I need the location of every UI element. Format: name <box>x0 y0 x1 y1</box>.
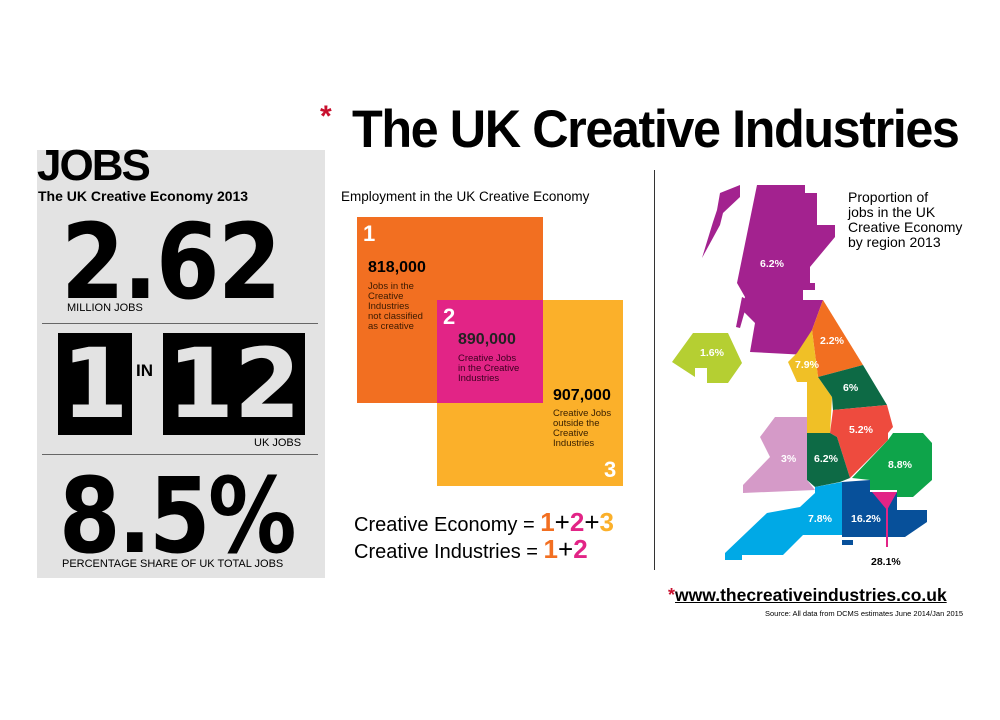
map heading: Creative Economy <box>848 219 962 235</box>
chart: venn squares: 3 <box>604 457 616 482</box>
heading: employment: Employment in the UK Creative Economy <box>341 189 589 204</box>
heading: JOBS: JOBS <box>37 141 149 190</box>
chart: venn squares: Jobs in the <box>368 281 414 292</box>
stat: 1 in 12: IN <box>136 361 153 380</box>
chart: venn squares: Creative Jobs <box>458 353 516 364</box>
panel: jobs <box>37 150 325 578</box>
chart: venn squares <box>357 217 623 486</box>
chart: UK map: 7.9% <box>795 359 820 371</box>
map heading: by region 2013 <box>848 234 941 250</box>
label 2: 2 <box>443 304 455 329</box>
stat: 8.5%: 8.5% <box>59 455 294 577</box>
title: The UK Creative Industries <box>352 100 958 159</box>
chart: UK map: 6.2% <box>814 453 839 465</box>
chart: venn squares: in the Creative <box>458 363 519 374</box>
icon: union jack asterisk: * <box>320 100 332 133</box>
stat: 1 in 12: 1 <box>62 328 128 440</box>
chart: UK map: 3% <box>781 453 797 465</box>
source note: Source: All data from DCMS estimates June 2014/Jan 2015 <box>765 609 963 618</box>
chart: UK map: 2.2% <box>820 335 845 347</box>
chart: venn squares: Industries <box>553 438 594 449</box>
chart: venn squares: 890,000 <box>458 331 516 348</box>
stat: 2.62 million jobs: 2.62 <box>61 201 280 323</box>
map heading <box>848 189 962 250</box>
stat: 1 in 12: 12 <box>167 328 301 440</box>
label 3: 907,000 <box>553 387 611 404</box>
stat: 1 in 12 <box>58 328 305 449</box>
chart: venn squares: Creative <box>368 291 403 302</box>
chart: UK map: 28.1% <box>871 556 901 568</box>
equations <box>354 507 614 564</box>
chart: UK map: 8.8% <box>888 459 913 471</box>
chart: venn squares: outside the <box>553 418 599 429</box>
map heading: jobs in the UK <box>848 204 935 220</box>
chart: UK map: 16.2% <box>851 513 881 525</box>
label 1: 1 <box>363 221 375 246</box>
chart: venn squares: Industries <box>368 301 409 312</box>
stat: 8.5%: PERCENTAGE SHARE OF UK TOTAL JOBS <box>62 558 283 570</box>
website link: *www.thecreativeindustries.co.uk <box>668 585 947 605</box>
equations: Creative Industries = 1+2 <box>354 534 588 564</box>
chart: venn squares: Creative <box>553 428 588 439</box>
chart: UK map: 5.2% <box>849 424 874 436</box>
chart: venn squares: 818,000 <box>368 259 426 276</box>
chart: venn squares: as creative <box>368 321 414 332</box>
chart: UK map: 6.2% <box>760 258 785 270</box>
map heading: Proportion of <box>848 189 928 205</box>
chart: venn squares: Industries <box>458 373 499 384</box>
equations: Creative Economy = 1+2+3 <box>354 507 614 537</box>
chart: UK map: 6% <box>843 382 859 394</box>
stat: 2.62 million jobs: MILLION JOBS <box>67 302 143 314</box>
chart: UK map: 7.8% <box>808 513 833 525</box>
chart: venn squares: not classified <box>368 311 423 322</box>
chart: venn squares: Creative Jobs <box>553 408 611 419</box>
subheading: The UK Creative Economy 2013 <box>38 188 248 204</box>
stat: 1 in 12: UK JOBS <box>254 437 301 449</box>
chart: UK map: 1.6% <box>700 347 725 359</box>
